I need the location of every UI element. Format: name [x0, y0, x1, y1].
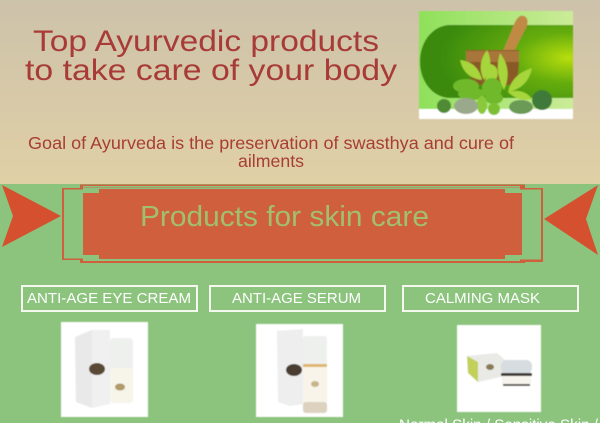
label: anti-age eye cream [22, 286, 197, 311]
image: mortar and herbs [419, 11, 573, 119]
left arrow [2, 185, 61, 247]
title: to take care of your body [25, 54, 397, 87]
product: eye cream [61, 322, 148, 417]
title: Top Ayurvedic products [33, 25, 379, 58]
label: anti-age eye cream: ANTI-AGE EYE CREAM [27, 290, 191, 307]
product: calming mask [457, 325, 541, 412]
product: serum [256, 324, 343, 417]
banner heading: Products for skin care [140, 201, 429, 233]
header background [0, 0, 600, 184]
title [25, 25, 397, 87]
label: calming mask [403, 286, 578, 311]
intro text: Goal of Ayurveda is the preservation of swasthya and cure of [28, 133, 514, 153]
label: anti-age serum: ANTI-AGE SERUM [232, 290, 361, 307]
label: anti-age serum [210, 286, 385, 311]
label: calming mask: CALMING MASK [425, 290, 540, 307]
intro text: ailments [238, 151, 304, 171]
intro text [28, 133, 514, 171]
section background [0, 184, 600, 423]
right arrow [544, 185, 598, 255]
banner [62, 184, 543, 263]
